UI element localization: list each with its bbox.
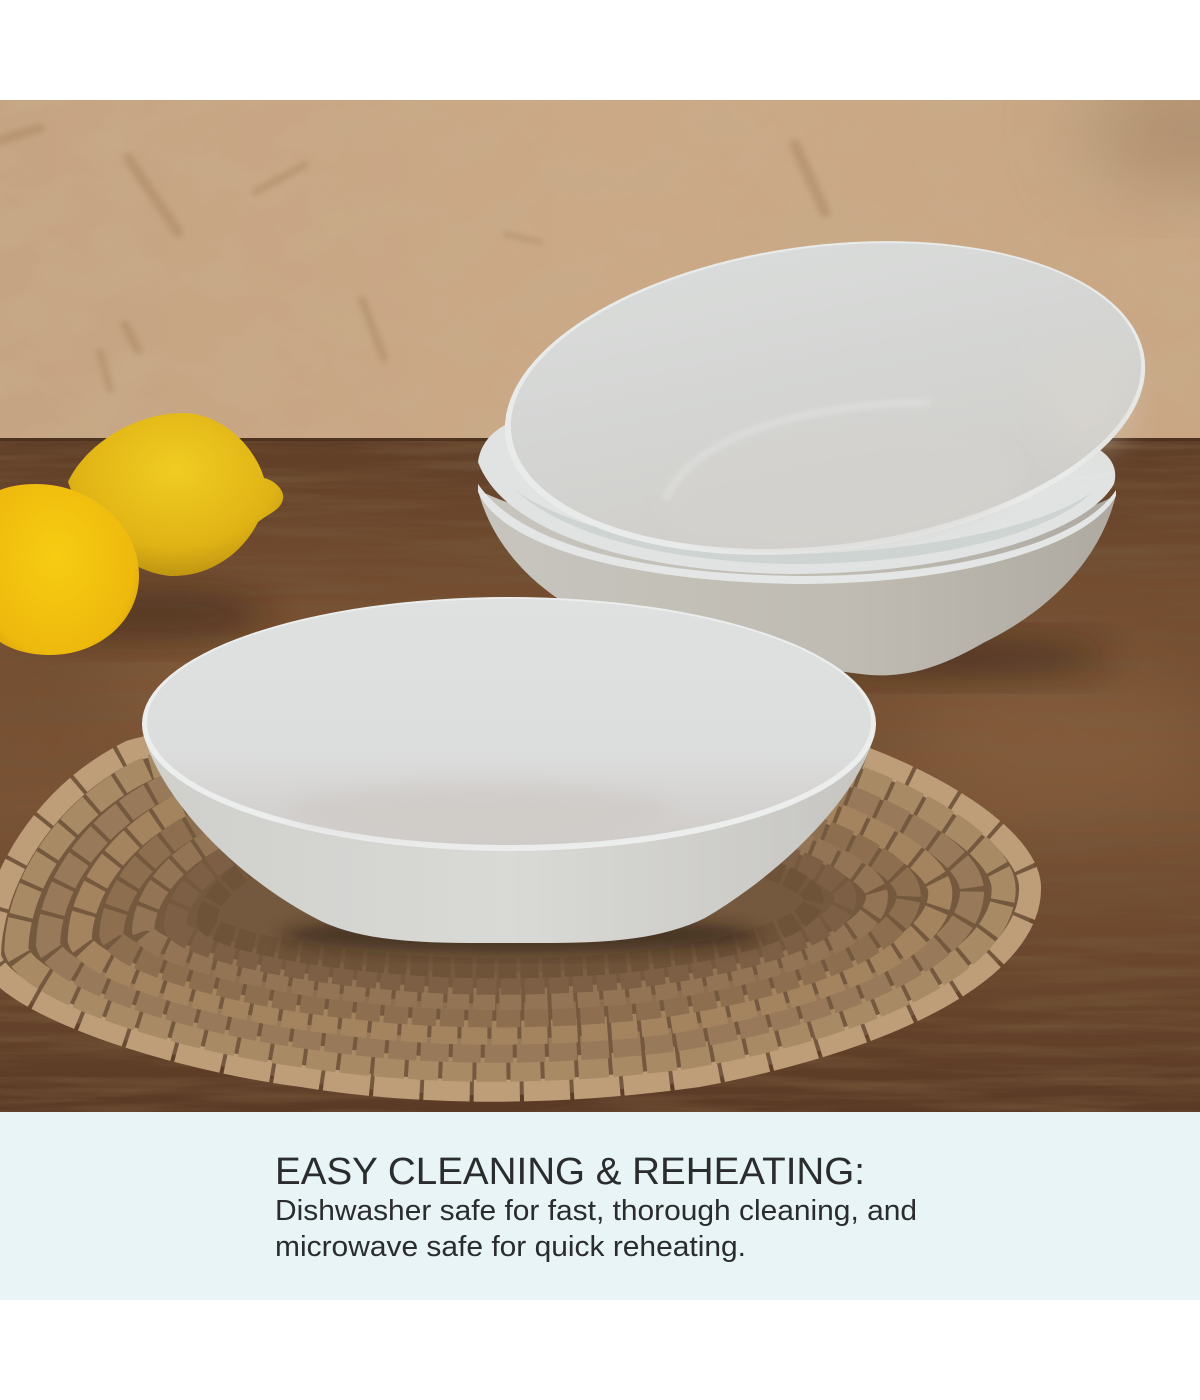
middle stacked bowl — [478, 423, 1115, 574]
caption body text: Dishwasher safe for fast, thorough cleaning, and — [275, 1195, 917, 1227]
front bowl shadow — [280, 917, 760, 953]
front lemon — [0, 484, 139, 655]
front bowl rim — [142, 597, 876, 851]
caption heading: EASY CLEANING & REHEATING: — [275, 1151, 865, 1193]
caption body text: microwave safe for quick reheating. — [275, 1231, 746, 1263]
plaster wall — [0, 70, 1200, 440]
woven placemat — [0, 715, 1038, 1095]
back lemon — [68, 413, 283, 576]
front bowl body — [142, 722, 876, 943]
caption body text — [275, 1195, 917, 1263]
caption band — [0, 1112, 1200, 1300]
bottom stacked bowl — [478, 484, 1116, 675]
top stacked bowl — [504, 241, 1146, 555]
stacked bowls shadow — [810, 638, 1110, 678]
front bowl — [142, 597, 876, 943]
stacked bowls — [478, 207, 1163, 675]
lemon shadows — [30, 589, 270, 641]
product photo — [0, 70, 1200, 1112]
front bowl interior — [147, 599, 871, 845]
wooden table — [0, 438, 1200, 1112]
